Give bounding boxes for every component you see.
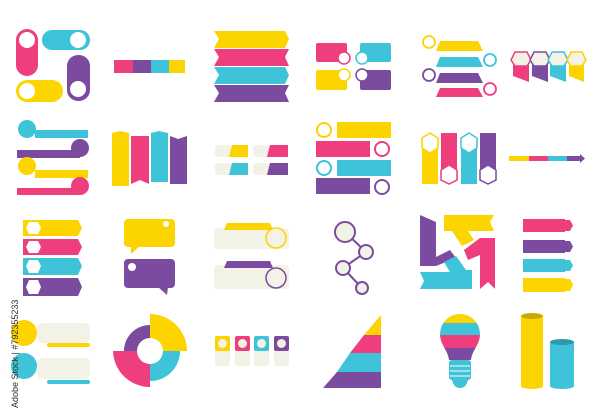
icon: four square labels: [215, 336, 289, 366]
icon: small tags: [215, 145, 288, 175]
icon: tab ribbons: [523, 219, 573, 292]
icon: hexagon arrow list: [23, 220, 82, 296]
icon: network nodes: [335, 222, 373, 294]
icon: half-circle list: [11, 320, 90, 384]
icon: layered triangle: [323, 315, 381, 388]
icon: loop of pills: [16, 29, 90, 102]
icon: small segmented bar: [114, 60, 185, 73]
icon: four boxes with circles: [316, 43, 391, 90]
icon: stacked ribbons: [214, 31, 289, 102]
icon: arrows square: [420, 215, 495, 289]
watermark text: Adobe Stock | #792355233: [10, 300, 20, 408]
icon: trapezoid list: [423, 36, 496, 97]
icon: folded columns: [112, 131, 187, 186]
icon: hexagon columns: [422, 133, 496, 184]
icon: light bulb: [440, 314, 480, 388]
icon: cylinders: [521, 313, 574, 389]
icon: framed banners with circles: [316, 122, 391, 194]
icon: speech bubbles: [124, 219, 175, 295]
icon: donut chart: [113, 314, 187, 387]
icon: cream panels with circles: [214, 223, 289, 289]
icon: line list with round caps: [17, 120, 89, 195]
icon: hexagon pendants: [511, 52, 586, 82]
icon: arrow line: [509, 154, 585, 163]
